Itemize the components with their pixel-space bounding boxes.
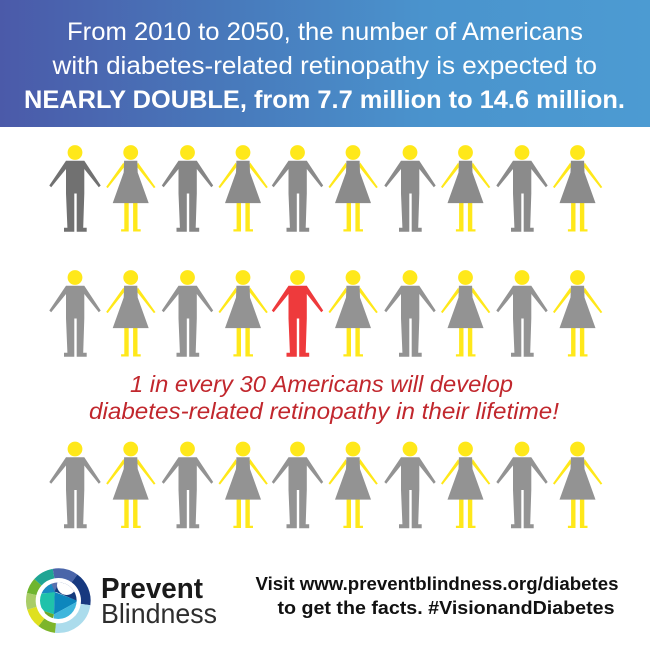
header statement: with diabetes-related retinopathy is expected to (51, 52, 597, 80)
call to action (256, 573, 618, 618)
call to action: to get the facts. #VisionandDiabetes (278, 597, 614, 618)
logo wordmark: Blindness (101, 598, 217, 629)
header statement: From 2010 to 2050, the number of Americans (67, 18, 583, 46)
row 1 of figures (49, 145, 602, 232)
red callout statistic: 1 in every 30 Americans will develop (130, 371, 513, 397)
call to action: Visit www.preventblindness.org/diabetes (256, 573, 618, 594)
logo icon: Prevent Blindness eye (26, 568, 91, 633)
header statement (24, 18, 625, 114)
header statement: NEARLY DOUBLE, from 7.7 million to 14.6 million. (24, 86, 625, 114)
logo wordmark (101, 573, 217, 629)
row 2 of figures with red highlighted person (49, 270, 602, 357)
header banner (0, 0, 650, 127)
logo wordmark: Prevent (101, 573, 203, 605)
red callout statistic (89, 371, 559, 424)
row 3 of figures (49, 442, 602, 528)
red callout statistic: diabetes-related retinopathy in their lifetime! (89, 398, 559, 424)
